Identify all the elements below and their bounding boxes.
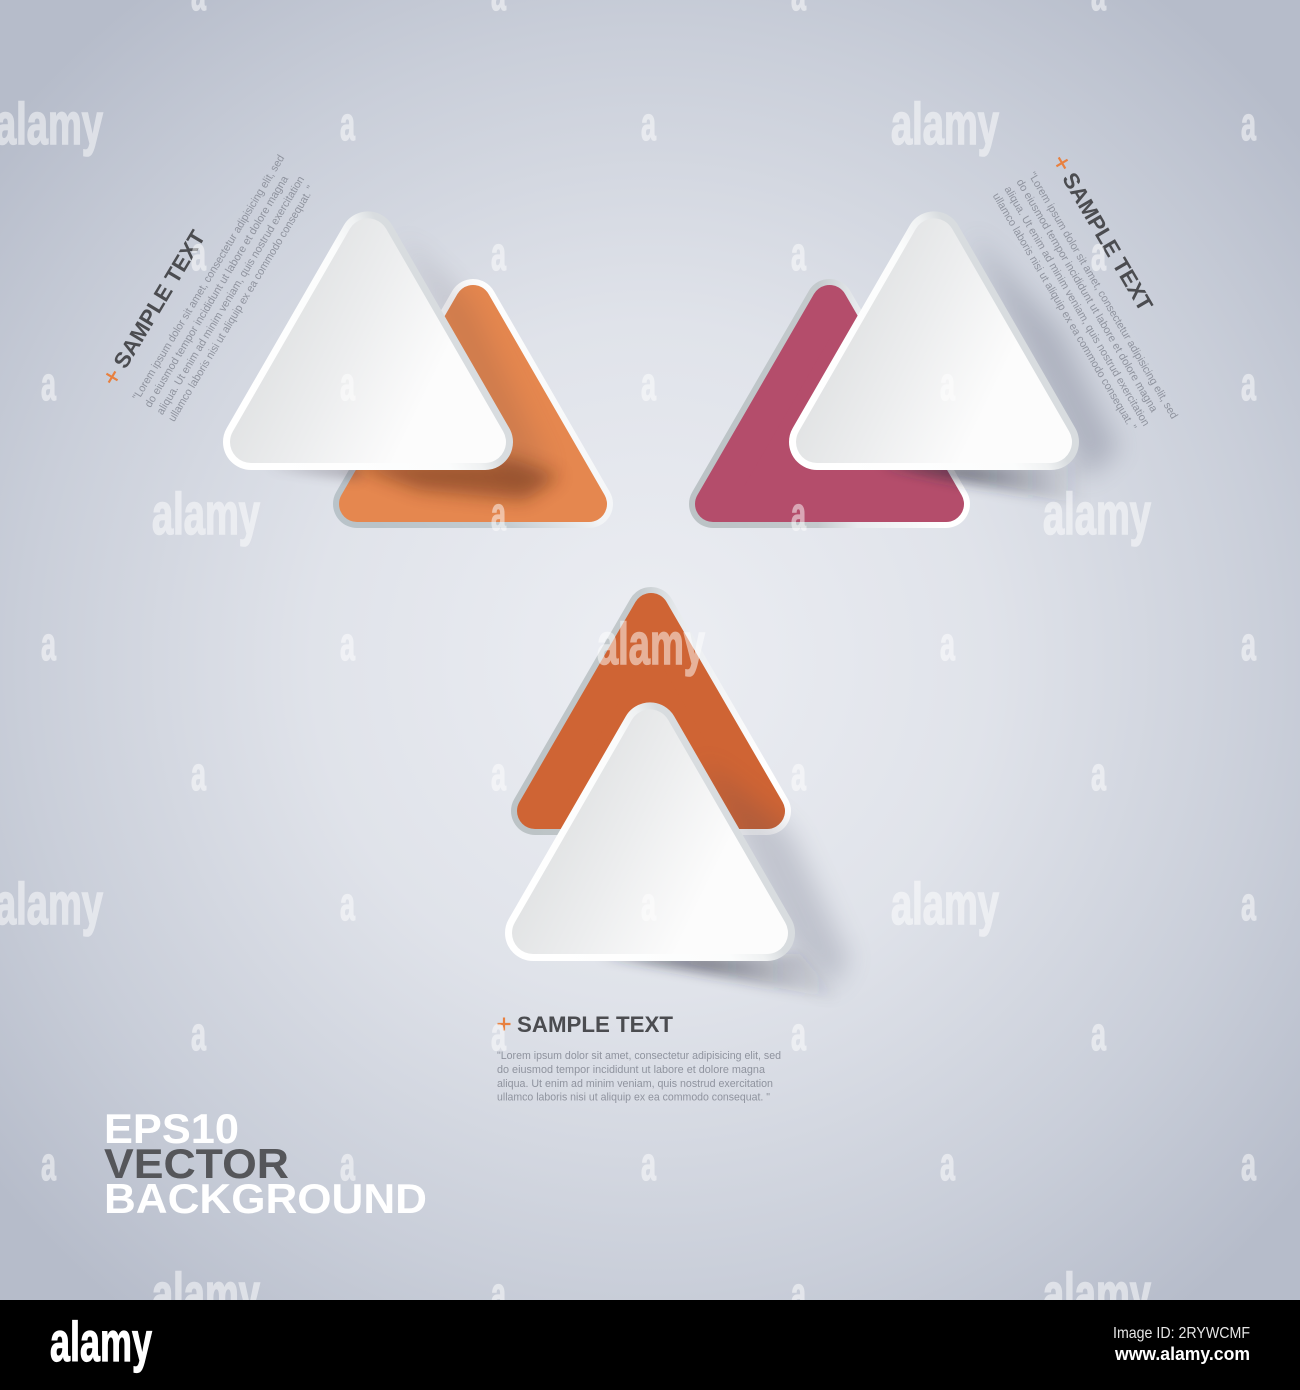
shadow: bottom paper right side <box>700 760 850 990</box>
watermark layer: a <box>1091 1007 1106 1060</box>
body: left lorem text: "Lorem ipsum dolor sit amet, consectetur adipisicing elit, sed <box>131 153 287 403</box>
text block: left rotated <box>98 133 323 424</box>
footer bar <box>0 1300 1300 1390</box>
watermark layer: a <box>1241 617 1256 670</box>
watermark layer: a <box>191 1007 206 1060</box>
watermark layer: a <box>940 617 955 670</box>
icon: bottom plus <box>498 1018 510 1030</box>
watermark layer: a <box>641 357 656 410</box>
watermark layer: a <box>791 487 806 540</box>
watermark layer: a <box>1241 1137 1256 1190</box>
body: bottom lorem text: do eiusmod tempor incididunt ut labore et dolore magna <box>497 1064 766 1076</box>
watermark layer: a <box>1091 747 1106 800</box>
body: right lorem text: aliqua. Ut enim ad minim veniam, quis nostrud exercitation <box>1002 184 1152 428</box>
watermark layer: a <box>1241 877 1256 930</box>
body: left lorem text: do eiusmod tempor incididunt ut labore et dolore magna <box>143 173 291 410</box>
text block: bottom <box>497 1012 781 1104</box>
watermark layer: alamy <box>891 92 999 157</box>
icon: right plus <box>1053 154 1071 172</box>
watermark layer: alamy <box>152 482 260 547</box>
heading: right sample text: SAMPLE TEXT <box>1057 168 1158 316</box>
watermark layer: a <box>641 97 656 150</box>
shadow: top-left paper bottom <box>345 458 560 500</box>
body: left lorem text: aliqua. Ut enim ad minim veniam, quis nostrud exercitation <box>155 174 307 417</box>
title: EPS10 vector background: BACKGROUND <box>104 1175 427 1222</box>
watermark layer: alamy <box>891 872 999 937</box>
watermark layer: a <box>791 227 806 280</box>
shadow: bottom paper bottom <box>600 954 840 1000</box>
watermark layer: a <box>940 357 955 410</box>
watermark layer: a <box>340 617 355 670</box>
watermark layer: a <box>340 877 355 930</box>
panel: top-right white triangle <box>817 239 1051 442</box>
watermark layer: a <box>41 617 56 670</box>
body: bottom lorem text <box>497 1050 781 1104</box>
watermark layer: a <box>340 1137 355 1190</box>
text block: right rotated <box>990 151 1213 442</box>
footer url: www.alamy.com <box>1114 1344 1250 1364</box>
heading: left sample text: SAMPLE TEXT <box>108 225 210 373</box>
watermark layer: a <box>641 877 656 930</box>
watermark layer: a <box>791 1267 806 1320</box>
body: right lorem text: "Lorem ipsum dolor sit amet, consectetur adipisicing elit, sed <box>1026 170 1180 421</box>
watermark layer: a <box>791 747 806 800</box>
body: bottom lorem text: aliqua. Ut enim ad minim veniam, quis nostrud exercitation <box>497 1078 773 1090</box>
watermark layer: a <box>41 357 56 410</box>
watermark layer: a <box>940 1137 955 1190</box>
watermark layer: alamy <box>1043 482 1151 547</box>
shadow: top-left paper left wedge <box>265 464 360 480</box>
watermark layer: a <box>340 97 355 150</box>
panel: rust triangle <box>535 611 767 811</box>
watermark layer: alamy <box>597 612 705 677</box>
watermark layer: a <box>191 227 206 280</box>
watermark layer: a <box>41 1137 56 1190</box>
footer image id: Image ID: 2RYWCMF <box>1113 1325 1250 1342</box>
icon: left plus <box>103 368 121 386</box>
body: bottom lorem text: ullamco laboris nisi ut aliquip ex ea commodo consequat. " <box>497 1092 770 1104</box>
body: bottom lorem text: "Lorem ipsum dolor sit amet, consectetur adipisicing elit, sed <box>497 1050 781 1062</box>
heading: bottom sample text: SAMPLE TEXT <box>517 1012 674 1037</box>
title: EPS10 vector background <box>104 1105 427 1222</box>
title: EPS10 vector background: EPS10 <box>104 1105 239 1152</box>
watermark layer: a <box>491 747 506 800</box>
watermark layer: a <box>641 1137 656 1190</box>
shadow: top-left paper right side <box>400 235 550 480</box>
shadow: top-right paper right side <box>970 232 1120 480</box>
watermark layer: a <box>191 747 206 800</box>
watermark layer: a <box>491 1007 506 1060</box>
watermark layer: alamy <box>1043 1262 1151 1327</box>
body: right lorem text: ullamco laboris nisi ut aliquip ex ea commodo consequat. " <box>990 191 1138 433</box>
body: left lorem text: ullamco laboris nisi ut aliquip ex ea commodo consequat. " <box>166 184 317 424</box>
watermark layer: a <box>1241 357 1256 410</box>
watermark layer: alamy <box>152 1262 260 1327</box>
watermark layer: a <box>340 357 355 410</box>
panel: orange triangle <box>357 303 589 504</box>
watermark layer: a <box>791 1007 806 1060</box>
panel: magenta triangle <box>713 303 946 504</box>
panel: top-left white triangle <box>251 239 485 442</box>
watermark layer: a <box>1241 97 1256 150</box>
panel: bottom white triangle <box>533 730 767 933</box>
body: right lorem text: do eiusmod tempor incididunt ut labore et dolore magna <box>1014 177 1160 415</box>
watermark layer: a <box>491 487 506 540</box>
watermark layer: a <box>491 1267 506 1320</box>
watermark layer: a <box>1091 227 1106 280</box>
watermark layer: a <box>491 227 506 280</box>
shadow: top-right paper bottom <box>880 462 1085 505</box>
title: EPS10 vector background: VECTOR <box>104 1140 289 1187</box>
footer logo: alamy <box>50 1310 152 1373</box>
